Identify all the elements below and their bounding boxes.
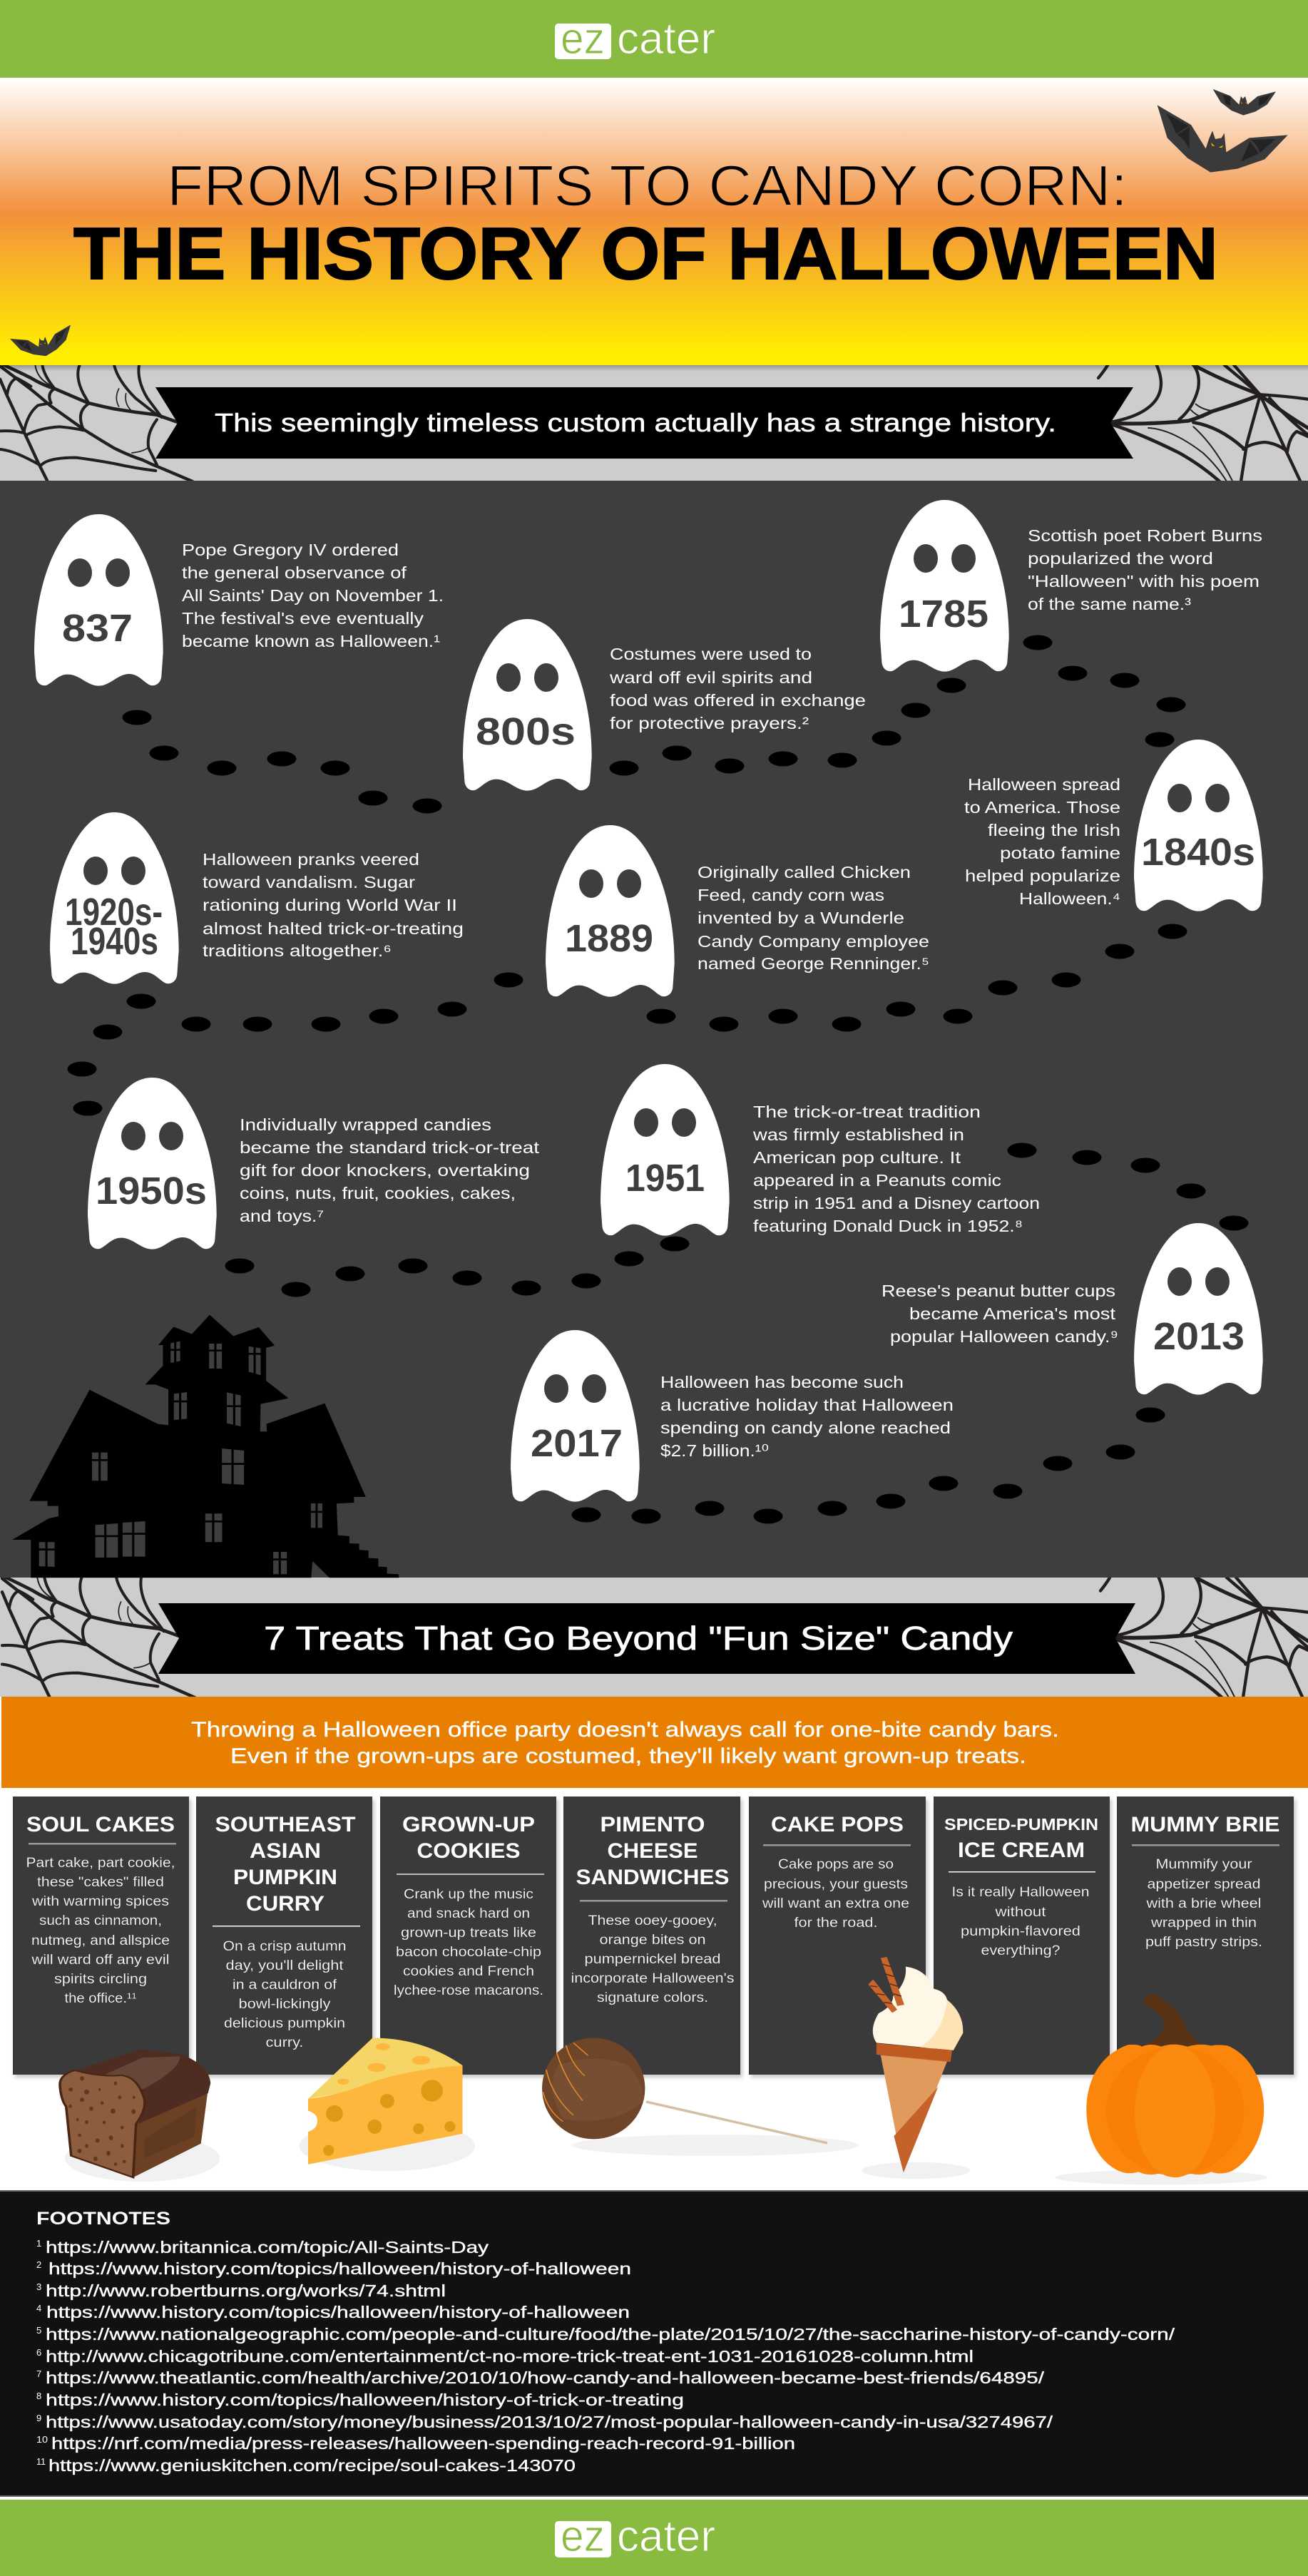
text: 1950s: Individually wrapped candies: [240, 1115, 491, 1134]
card: grown-up cookies: COOKIES: [417, 1839, 521, 1863]
footnotes list: https://www.history.com/topics/halloween/history-of-halloween: [48, 2259, 631, 2278]
card: pimento cheese sandwiches: PIMENTO: [601, 1813, 705, 1836]
card: mummy brie: puff pastry strips.: [1145, 1935, 1262, 1950]
card: grown-up cookies: GROWN-UP: [402, 1813, 535, 1836]
card: mummy brie: wrapped in thin: [1150, 1916, 1257, 1931]
text: 800s: [609, 645, 866, 732]
card: spiced-pumpkin ice cream: without: [994, 1905, 1046, 1920]
card: soul cakes: SOUL CAKES: [26, 1813, 175, 1836]
icon: ghost 1889: 1889: [565, 917, 653, 960]
icon: ghost 1785: [880, 500, 1009, 672]
card: southeast asian pumpkin curry: in a cauldron of: [233, 1978, 337, 1993]
text: 1951: strip in 1951 and a Disney cartoon: [753, 1194, 1040, 1212]
card: pimento cheese sandwiches: incorporate Halloween's: [571, 1971, 735, 1986]
card: soul cakes: such as cinnamon,: [39, 1913, 162, 1928]
footnotes list: 8: [36, 2391, 41, 2401]
icon: ghost 1840s: [1134, 740, 1263, 911]
text: 1785: popularized the word: [1028, 549, 1213, 568]
icon: ghost 837: [34, 514, 163, 686]
card: cake pops: CAKE POPS: [771, 1813, 904, 1836]
card: spiced-pumpkin ice cream: pumpkin-flavored: [961, 1924, 1080, 1939]
text: 1920s-1940s: traditions altogether.⁶: [203, 941, 392, 960]
card: mummy brie: MUMMY BRIE: [1131, 1813, 1279, 1836]
header bar with logo: ez: [561, 14, 605, 63]
icon: ghost 1950s: 1950s: [96, 1170, 207, 1212]
card: soul cakes: will ward off any evil: [31, 1953, 169, 1968]
card: pimento cheese sandwiches: SANDWICHES: [576, 1866, 729, 1889]
footnotes list: 4: [36, 2303, 41, 2314]
text: 1950s: gift for door knockers, overtaking: [240, 1161, 530, 1180]
entry: 1950s: [88, 1078, 540, 1249]
footnotes list: [36, 2238, 1175, 2475]
footnotes list: https://www.nationalgeographic.com/people-and-culture/food/the-plate/2015/10/27/the-saccharine-history-of-candy-corn/: [46, 2325, 1175, 2344]
card: mummy brie: appetizer spread: [1147, 1877, 1261, 1892]
title panel: [0, 78, 1308, 372]
footnotes list: http://www.robertburns.org/works/74.shtml: [46, 2281, 446, 2300]
text: 2013: [882, 1282, 1118, 1346]
footnotes list: 5: [36, 2325, 41, 2336]
text: 1951: appeared in a Peanuts comic: [753, 1171, 1001, 1190]
card: pimento cheese sandwiches: signature colors.: [597, 1990, 708, 2005]
text: 1920s-1940s: almost halted trick-or-treating: [203, 919, 464, 938]
card: soul cakes: Part cake, part cookie,: [26, 1856, 175, 1871]
card: soul cakes: the office.¹¹: [64, 1991, 137, 2006]
text: 2013: Reese's peanut butter cups: [882, 1282, 1115, 1300]
text: 2017: $2.7 billion.¹⁰: [660, 1441, 769, 1460]
text: 1840s: [964, 775, 1120, 908]
card: pimento cheese sandwiches: CHEESE: [608, 1839, 698, 1863]
text: 1840s: Halloween.⁴: [1019, 889, 1120, 908]
icon: ghost 2017: [511, 1330, 640, 1502]
icon: ghost 1920s-1940s: 1940s: [71, 920, 158, 963]
footnotes list: https://www.usatoday.com/story/money/business/2013/10/27/most-popular-halloween-candy-in-usa/3274967/: [46, 2413, 1053, 2431]
text: 1785: [1028, 526, 1262, 613]
text: 1840s: fleeing the Irish: [988, 821, 1120, 839]
card: cake pops: will want an extra one: [762, 1896, 909, 1911]
text: 1889: named George Renninger.⁵: [698, 954, 929, 973]
icon: ice cream cone: [862, 1957, 970, 2179]
card: mummy brie: Mummify your: [1155, 1857, 1252, 1872]
text: 1889: Originally called Chicken: [698, 863, 911, 881]
icon: cake pop: [542, 2038, 859, 2156]
text: 1840s: helped popularize: [965, 867, 1120, 885]
icon: ghost 2013: 2013: [1153, 1315, 1245, 1358]
text: 837: the general observance of: [182, 563, 407, 582]
text: 1950s: and toys.⁷: [240, 1207, 324, 1225]
icon: ghost 800s: [463, 619, 592, 791]
orange intro band: Even if the grown-ups are costumed, they'll likely want grown-up treats.: [230, 1744, 1026, 1768]
text: 1951: featuring Donald Duck in 1952.⁸: [753, 1217, 1023, 1235]
footnotes list: 6: [36, 2347, 41, 2358]
text: 837: The festival's eve eventually: [182, 609, 424, 628]
footnotes list: 3: [36, 2281, 41, 2292]
text: 1840s: Halloween spread: [968, 775, 1120, 794]
footnotes list: 10: [36, 2434, 48, 2445]
entry: 1840s: [964, 740, 1263, 911]
header bar with logo: cater: [617, 14, 715, 63]
icon: ghost 837: 837: [62, 607, 133, 650]
text: 1785: Scottish poet Robert Burns: [1028, 526, 1262, 545]
entry: 837: [34, 514, 444, 686]
card: spiced-pumpkin ice cream: [934, 1796, 1110, 2075]
header bar with logo: [0, 0, 1308, 78]
footer bar with logo: [0, 2500, 1308, 2576]
card: grown-up cookies: grown-up treats like: [401, 1926, 536, 1941]
card: southeast asian pumpkin curry: On a crisp autumn: [223, 1939, 347, 1954]
text: 837: [182, 541, 444, 650]
text: 1920s-1940s: rationing during World War II: [203, 896, 457, 914]
text: 1951: The trick-or-treat tradition: [753, 1103, 981, 1121]
orange intro band: Throwing a Halloween office party doesn't always call for one-bite candy bars.: [191, 1718, 1059, 1742]
card: soul cakes: [13, 1796, 189, 2075]
icon: cheese wedge: [300, 2038, 475, 2171]
text: 1950s: [240, 1115, 540, 1225]
card: cake pops: precious, your guests: [764, 1877, 908, 1892]
card: soul cakes: spirits circling: [54, 1972, 147, 1987]
text: 2017: a lucrative holiday that Halloween: [660, 1396, 954, 1414]
banner: treats heading: [158, 1603, 1135, 1674]
text: 1889: Feed, candy corn was: [698, 886, 884, 904]
icon: ghost 1785: 1785: [899, 593, 988, 635]
icon: bread loaf: [60, 2050, 220, 2182]
card: southeast asian pumpkin curry: ASIAN: [250, 1839, 321, 1863]
card shadows: [15, 1799, 1296, 2077]
footnotes list: https://www.history.com/topics/halloween/history-of-halloween: [46, 2303, 630, 2321]
banner: treats heading: 7 Treats That Go Beyond "Fun Size" Candy: [264, 1620, 1013, 1657]
footnotes list: https://nrf.com/media/press-releases/halloween-spending-reach-record-91-billion: [51, 2434, 795, 2453]
card: spiced-pumpkin ice cream: everything?: [981, 1943, 1060, 1958]
treats web band: [0, 1578, 1308, 1697]
text: 1889: Candy Company employee: [698, 932, 929, 951]
card: cake pops: [749, 1796, 926, 2075]
card: southeast asian pumpkin curry: SOUTHEAST: [215, 1813, 355, 1836]
text: 1889: [698, 863, 929, 973]
entry: 1889: [546, 825, 929, 997]
card: mummy brie: [1117, 1796, 1294, 2075]
card: southeast asian pumpkin curry: curry.: [265, 2035, 304, 2050]
text: 837: became known as Halloween.¹: [182, 632, 440, 650]
card: pimento cheese sandwiches: orange bites on: [599, 1933, 706, 1948]
footnotes panel: [0, 2190, 1308, 2497]
text: 800s: for protective prayers.²: [610, 714, 809, 732]
timeline panel: [0, 481, 1308, 1578]
card: southeast asian pumpkin curry: delicious pumpkin: [224, 2016, 345, 2031]
footnotes list: https://www.geniuskitchen.com/recipe/soul-cakes-143070: [48, 2456, 576, 2475]
icon: ghost 2017: 2017: [531, 1422, 623, 1465]
card: soul cakes: with warming spices: [31, 1894, 169, 1909]
text: 2013: popular Halloween candy.⁹: [890, 1327, 1118, 1346]
card: grown-up cookies: and snack hard on: [407, 1906, 530, 1921]
card: pimento cheese sandwiches: pumpernickel bread: [585, 1952, 720, 1967]
icon: ghost 1920s-1940s: 1920s-: [65, 891, 163, 934]
text: 800s: ward off evil spirits and: [609, 668, 812, 687]
text: 1951: was firmly established in: [752, 1125, 964, 1144]
footnotes list: 2: [36, 2259, 41, 2270]
text: 2013: became America's most: [909, 1304, 1116, 1323]
title line 1: FROM SPIRITS TO CANDY CORN:: [167, 154, 1128, 218]
text: 837: All Saints' Day on November 1.: [182, 586, 444, 605]
text: 1920s-1940s: toward vandalism. Sugar: [203, 873, 415, 891]
card: soul cakes: nutmeg, and allspice: [31, 1933, 170, 1948]
footnotes list: https://www.britannica.com/topic/All-Saints-Day: [46, 2238, 489, 2256]
card: southeast asian pumpkin curry: day, you'll delight: [225, 1958, 344, 1973]
footnotes list: https://www.theatlantic.com/health/archive/2010/10/how-candy-and-halloween-became-best-friends/64895/: [46, 2368, 1045, 2387]
card: spiced-pumpkin ice cream: ICE CREAM: [958, 1839, 1085, 1862]
card: southeast asian pumpkin curry: CURRY: [246, 1892, 325, 1916]
card: southeast asian pumpkin curry: PUMPKIN: [233, 1866, 337, 1889]
entry: 1951: [601, 1064, 1040, 1236]
text: 800s: food was offered in exchange: [610, 691, 866, 710]
orange intro band: [1, 1697, 1308, 1788]
footnotes list: 7: [36, 2368, 41, 2379]
text: 2017: [660, 1373, 954, 1460]
card: spiced-pumpkin ice cream: SPICED-PUMPKIN: [944, 1815, 1098, 1834]
timeline dotted path: [67, 635, 1248, 1523]
entry: 2013: [882, 1223, 1263, 1395]
text: 1920s-1940s: [203, 850, 464, 960]
footnotes list: 11: [36, 2456, 46, 2467]
text: 1785: "Halloween" with his poem: [1028, 572, 1260, 591]
icon: small bat left: [10, 324, 71, 356]
footnotes heading: FOOTNOTES: [36, 2209, 170, 2229]
text: 1951: [752, 1103, 1040, 1235]
text: 1950s: became the standard trick-or-treat: [240, 1138, 540, 1157]
text: 1840s: to America. Those: [964, 798, 1120, 817]
text: 800s: Costumes were used to: [610, 645, 812, 663]
icon: ghost 1840s: 1840s: [1141, 831, 1255, 874]
icon: ghost 2013: [1134, 1223, 1263, 1395]
footnotes list: http://www.chicagotribune.com/entertainment/ct-no-more-trick-treat-ent-1031-20161028-column.html: [46, 2347, 974, 2366]
text: 2017: spending on candy alone reached: [660, 1419, 951, 1437]
entry: 2017: [511, 1330, 954, 1502]
card: southeast asian pumpkin curry: [196, 1796, 372, 2075]
icon: ghost 800s: 800s: [476, 710, 576, 753]
text: 1920s-1940s: Halloween pranks veered: [203, 850, 419, 869]
icon: ghost 1951: 1951: [625, 1157, 705, 1200]
footnotes list: 1: [36, 2238, 41, 2249]
text: 1951: American pop culture. It: [753, 1148, 961, 1167]
card: cake pops: Cake pops are so: [778, 1857, 894, 1872]
intro web band: [0, 365, 1308, 481]
footer bar with logo: cater: [617, 2512, 715, 2561]
text: 2017: Halloween has become such: [660, 1373, 904, 1391]
text: 1840s: potato famine: [1000, 844, 1120, 862]
card: southeast asian pumpkin curry: bowl-lickingly: [238, 1997, 331, 2012]
title line 2: THE HISTORY OF HALLOWEEN: [73, 213, 1218, 295]
entry: 1920s-1940s: [50, 812, 464, 984]
footnotes list: 9: [36, 2413, 41, 2423]
text: 1889: invented by a Wunderle: [698, 909, 904, 927]
card: grown-up cookies: Crank up the music: [404, 1887, 533, 1902]
card: pimento cheese sandwiches: These ooey-gooey,: [588, 1913, 717, 1928]
card: cake pops: for the road.: [794, 1916, 877, 1931]
icon: ghost 1950s: [88, 1078, 217, 1249]
card: soul cakes: these "cakes" filled: [37, 1875, 164, 1890]
card: grown-up cookies: bacon chocolate-chip: [396, 1945, 541, 1960]
card: grown-up cookies: [380, 1796, 556, 2075]
card: grown-up cookies: lychee-rose macarons.: [394, 1983, 543, 1998]
icon: pumpkin: [1056, 1994, 1267, 2184]
banner: intro: This seemingly timeless custom actually has a strange history.: [215, 408, 1056, 437]
icon: large bat: [1158, 105, 1288, 173]
footer bar with logo: ez: [561, 2512, 605, 2561]
entry: 800s: [463, 619, 866, 791]
icon: bats: [10, 89, 1288, 356]
icon: ghost 1951: [601, 1064, 730, 1236]
card: spiced-pumpkin ice cream: Is it really Halloween: [951, 1885, 1090, 1900]
icon: small bat top: [1213, 89, 1276, 116]
entry: 1785: [880, 500, 1262, 672]
icon: haunted house: [12, 1315, 399, 1578]
icon: ghost 1889: [546, 825, 675, 997]
text: 1785: of the same name.³: [1028, 595, 1191, 613]
text: 1950s: coins, nuts, fruit, cookies, cakes,: [240, 1184, 516, 1202]
footnotes list: https://www.history.com/topics/halloween/history-of-trick-or-treating: [46, 2391, 684, 2409]
card: grown-up cookies: cookies and French: [403, 1964, 534, 1979]
icon: ghost 1920s-1940s: [50, 812, 179, 984]
banner: intro: [155, 387, 1133, 459]
card: pimento cheese sandwiches: [563, 1796, 740, 2075]
text: 837: Pope Gregory IV ordered: [182, 541, 399, 559]
card: mummy brie: with a brie wheel: [1145, 1896, 1261, 1911]
